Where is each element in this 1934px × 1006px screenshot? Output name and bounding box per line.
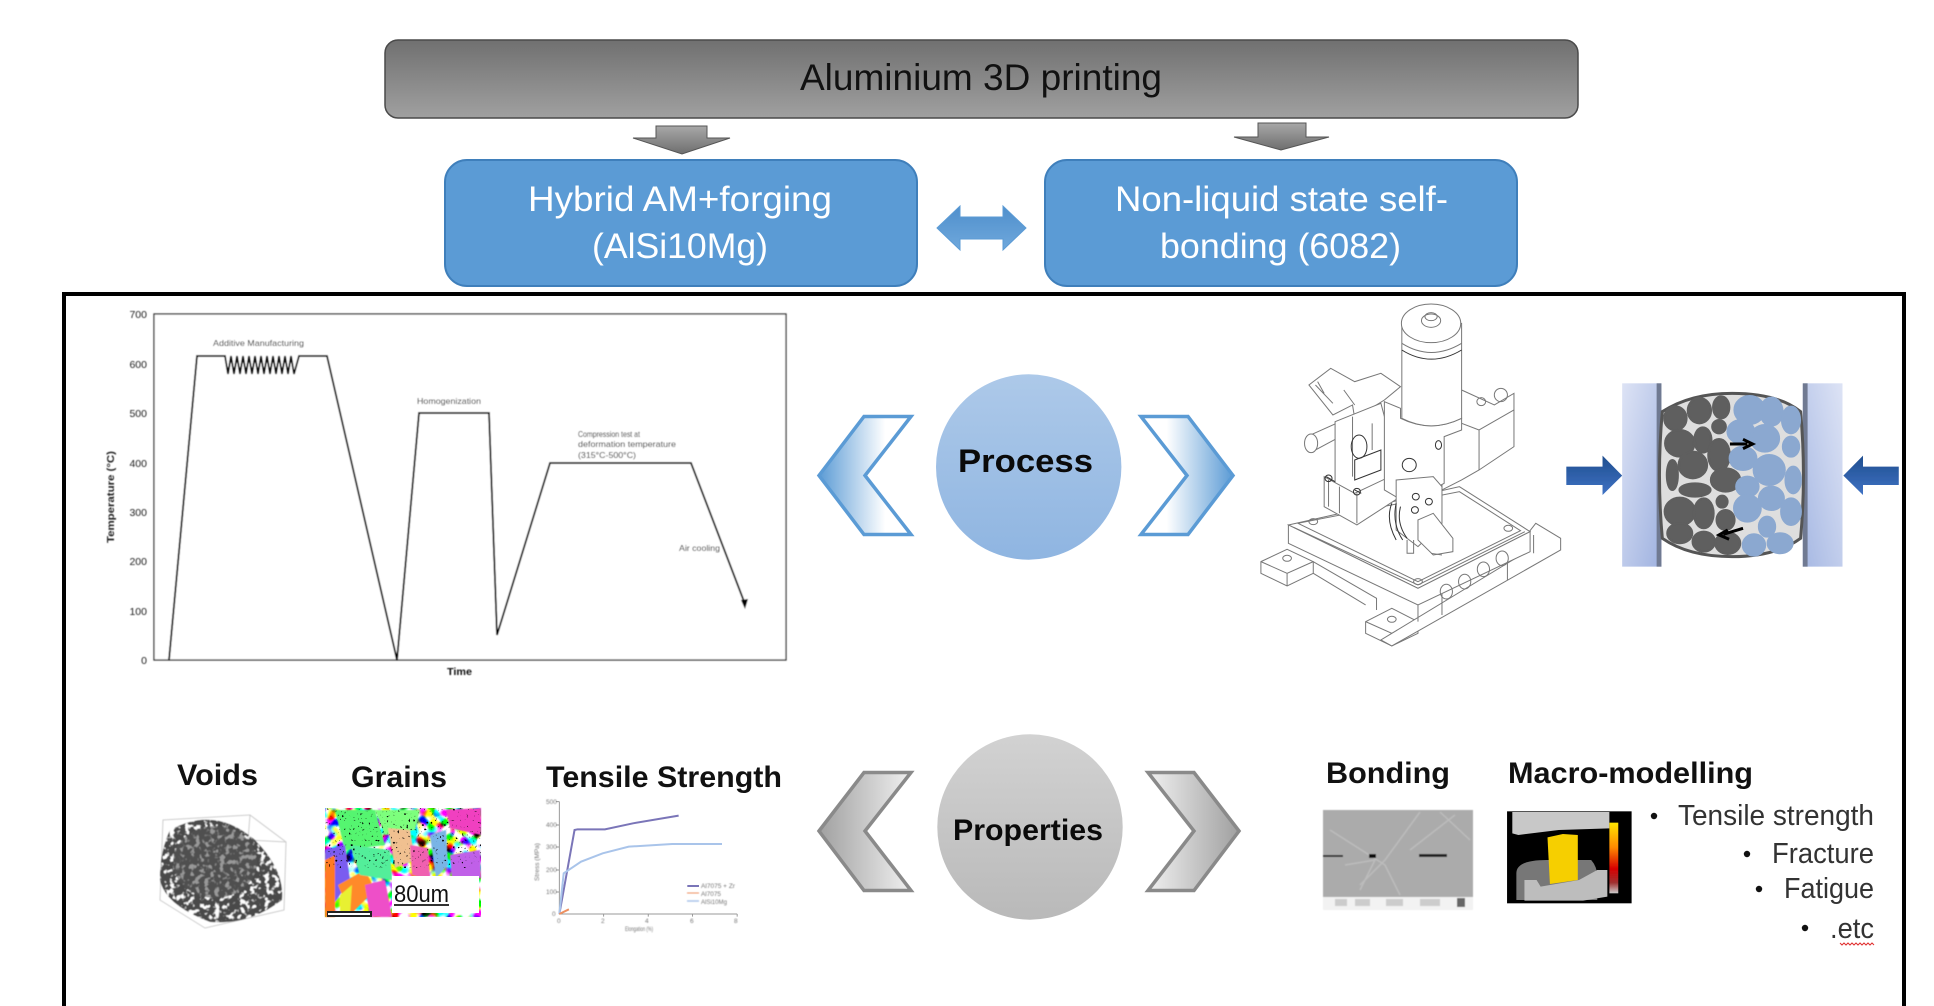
y axis title: Temperature (°C) [106, 451, 117, 543]
y axis tick labels: 600 [129, 359, 147, 371]
temperature curve [169, 356, 745, 660]
y axis tick labels: 0 [141, 655, 147, 667]
chart labels: tensile axes and legend: 2 [601, 918, 605, 925]
right press arrow [1843, 456, 1899, 495]
chevron: properties left [819, 772, 911, 890]
chart labels: tensile axes and legend: 100 [546, 889, 557, 896]
arrow: down to self-bonding box [1234, 123, 1329, 150]
chart labels: tensile axes and legend: AlSi10Mg [701, 899, 727, 906]
chart labels: tensile axes and legend: Al7075 [701, 891, 721, 898]
curve annotations: Air cooling [679, 543, 720, 553]
arrow: down to hybrid box [633, 126, 730, 154]
curve annotations: Homogenization [417, 396, 481, 406]
heading: Grains: Grains [351, 761, 447, 794]
chart labels: tensile axes and legend: 0 [557, 918, 561, 925]
image: bonding micrograph [1323, 810, 1473, 910]
blue grains [1728, 396, 1801, 556]
left press arrow [1566, 456, 1622, 495]
purple curve [559, 816, 679, 914]
box: Hybrid AM+forging [445, 160, 917, 286]
axes [556, 802, 737, 917]
circle: Process [936, 374, 1121, 560]
y axis tick labels: 700 [129, 309, 147, 321]
chart labels: tensile axes and legend: Elongation (%) [625, 926, 653, 933]
chart labels: tensile axes and legend: 300 [546, 844, 557, 851]
box: Hybrid AM+forging: (AlSi10Mg) [592, 227, 768, 266]
y axis tick labels: 100 [129, 606, 147, 618]
curve annotations: Compression test at [578, 429, 641, 439]
chart labels: tensile axes and legend: Stress (MPa) [534, 843, 541, 881]
grain movement arrows [1719, 439, 1753, 539]
y axis tick labels: 200 [129, 556, 147, 568]
right platen [1803, 383, 1842, 567]
y axis tick labels: 400 [129, 458, 147, 470]
heading: Voids: Voids [177, 759, 258, 792]
title bar: Aluminium 3D printing [385, 40, 1578, 118]
image: macro forging simulation [1507, 811, 1632, 903]
illustration: compression of grains between platens [1566, 383, 1899, 567]
image: EBSD grain map [325, 808, 481, 917]
arrow: double-headed between boxes [937, 206, 1026, 250]
curve annotations [213, 338, 720, 553]
chart: temperature vs time process curve [106, 309, 786, 678]
box: Non-liquid state self-bonding: Non-liquid state self- [1115, 180, 1448, 219]
circle: Process: Process [958, 443, 1093, 479]
chevron: process right [1141, 416, 1233, 534]
chart labels: tensile axes and legend: 500 [546, 799, 557, 806]
bullet list: modelled properties: .etc [1830, 913, 1874, 945]
bullet list: modelled properties: Fracture [1772, 838, 1874, 870]
circle: Properties [937, 734, 1123, 920]
bullet list: modelled properties: Fatigue [1784, 873, 1874, 905]
curve annotations: Additive Manufacturing [213, 338, 304, 348]
chart: stress vs elongation [556, 802, 737, 917]
barrelled specimen [1659, 393, 1803, 557]
chart labels: tensile axes and legend: 0 [552, 911, 556, 918]
chart labels: tensile axes and legend: Al7075 + Zr [701, 883, 736, 890]
curve annotations: (315°C-500°C) [578, 450, 636, 460]
light blue curve [559, 844, 722, 914]
chevron: properties right [1148, 772, 1239, 890]
box: Non-liquid state self-bonding [1045, 160, 1517, 286]
bullet list: modelled properties [1651, 800, 1874, 945]
heading: Tensile Strength: Tensile Strength [546, 761, 782, 794]
chart labels: tensile axes and legend: 4 [645, 918, 649, 925]
image: voids 3D scan [160, 815, 286, 928]
chart labels: tensile axes and legend: 6 [690, 918, 694, 925]
panel: main frame [64, 294, 1904, 1006]
chart labels: tensile axes and legend [534, 799, 738, 933]
y axis tick labels: 500 [129, 408, 147, 420]
curve end arrowhead [741, 599, 748, 609]
heading: Macro-modelling: Macro-modelling [1508, 757, 1753, 790]
image: EBSD grain map: 80um [394, 881, 449, 908]
circle: Properties: Properties [953, 814, 1103, 847]
legend lines [687, 885, 699, 887]
left platen [1622, 383, 1661, 567]
y axis tick labels: 300 [129, 507, 147, 519]
orange curve [559, 909, 569, 914]
heading: Bonding: Bonding [1326, 757, 1450, 790]
chevron: process left [819, 416, 911, 534]
dark grains [1664, 396, 1740, 554]
x axis title: Time [447, 666, 472, 678]
title bar: Aluminium 3D printing: Aluminium 3D printing [800, 57, 1162, 98]
chart labels: tensile axes and legend: 200 [546, 867, 557, 874]
illustration: machine head on base plate [1261, 304, 1561, 646]
chart labels: tensile axes and legend: 8 [734, 918, 738, 925]
y axis tick labels [129, 309, 147, 667]
box: Hybrid AM+forging: Hybrid AM+forging [528, 180, 832, 219]
chart labels: tensile axes and legend: 400 [546, 822, 557, 829]
box: Non-liquid state self-bonding: bonding (6082) [1160, 227, 1401, 266]
curve annotations: deformation temperature [578, 439, 676, 449]
bullet list: modelled properties: Tensile strength [1678, 800, 1874, 832]
